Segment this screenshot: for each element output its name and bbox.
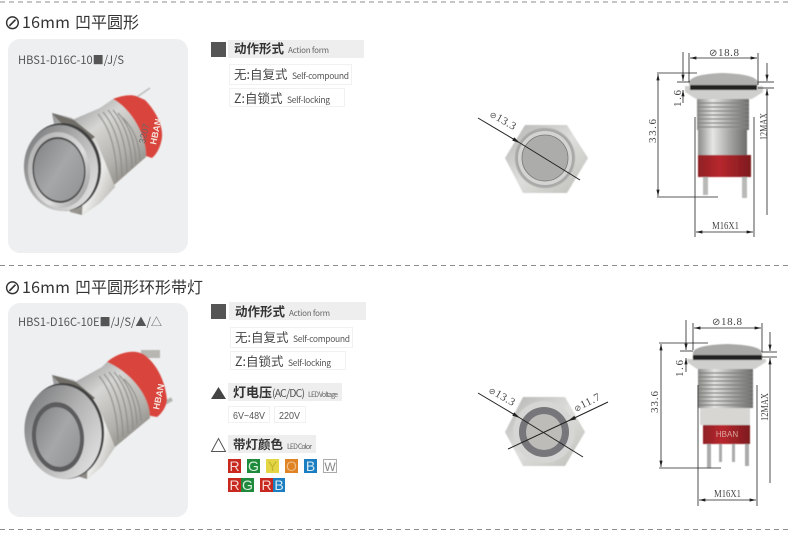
- dimension drawing 2: 12MAX: [759, 393, 771, 421]
- color swatches: R: [229, 458, 240, 474]
- front view 2: ⊘11.7: [572, 391, 603, 415]
- color swatches: G: [242, 477, 253, 493]
- spec: LED color: [212, 434, 336, 493]
- color swatches: Y: [268, 458, 278, 474]
- panel: product photo 2: [8, 303, 188, 517]
- dimension drawing 1: ⊘18.8: [709, 47, 740, 59]
- model number 1: HBS1-D16C-10■/J/S: [18, 52, 124, 68]
- heading: 16mm recessed flat round: ⊘: [4, 10, 21, 34]
- spec: action form 1: [211, 38, 364, 107]
- spec: action form 1: Self-locking: [287, 94, 330, 106]
- spec: action form 2: [211, 301, 366, 370]
- model number 2: HBS1-D16C-10E■/J/S/▲/△: [18, 314, 162, 330]
- color swatches: [228, 458, 336, 493]
- heading: 16mm recessed flat round: 凹平圆形: [75, 9, 139, 33]
- spec: action form 2: Action form: [289, 308, 330, 319]
- spec: LED voltage: LED Voltage: [308, 390, 338, 400]
- spec: action form 2: 动作形式: [235, 301, 286, 320]
- color swatches: O: [286, 458, 297, 474]
- color swatches: B: [274, 477, 284, 493]
- spec: action form 1: 动作形式: [234, 38, 285, 57]
- dimension drawing 2: 33.6: [649, 390, 661, 413]
- spec: action form 2: 无:自复式: [235, 327, 289, 346]
- dimension drawing 2: HBAN: [716, 430, 738, 439]
- spec: action form 1: 无:自复式: [234, 64, 288, 83]
- spec: LED color: 带灯颜色: [233, 434, 284, 453]
- panel: product photo 2: HBAN: [151, 383, 166, 410]
- photo: flat push button: [20, 88, 162, 215]
- front view 2: [478, 384, 608, 466]
- color swatches: R: [229, 477, 240, 493]
- photo: ring-lit push button: [20, 350, 172, 483]
- spec: action form 1: Self-compound: [292, 70, 349, 82]
- heading: 16mm recessed flat round with ring light: ⊘: [4, 275, 21, 299]
- dimension drawing 1: M16X1: [712, 220, 739, 232]
- color swatches: G: [248, 458, 259, 474]
- spec: LED voltage: 灯电压: [233, 382, 272, 401]
- dimension drawing 2: M16X1: [714, 488, 741, 500]
- front view 1: ⊘13.3: [488, 108, 519, 133]
- color swatches: W: [324, 460, 336, 474]
- panel: product photo 1: 3207: [137, 123, 151, 144]
- heading: 16mm recessed flat round with ring light: 凹平圆形环形带灯: [75, 274, 203, 298]
- dimension drawing 1: 12MAX: [758, 113, 770, 140]
- front view 2: ⊘13.3: [486, 384, 518, 409]
- color swatches: R: [261, 477, 272, 493]
- front view 1: [478, 108, 588, 193]
- spec: LED voltage: 6V~48V: [233, 411, 265, 422]
- color swatches: B: [306, 458, 315, 474]
- dimension drawing 1: 1.6: [672, 90, 684, 107]
- spec: LED voltage: 220V: [279, 411, 300, 422]
- heading: 16mm recessed flat round: 16mm: [22, 9, 70, 33]
- spec: action form 2: Self-locking: [288, 357, 331, 369]
- panel: product photo 1: HBAN: [148, 118, 163, 145]
- dimension drawing 2: 1.6: [674, 360, 686, 377]
- heading: 16mm recessed flat round with ring light: 16mm: [22, 274, 70, 298]
- spec: action form 2: Z:自锁式: [235, 351, 284, 370]
- spec: LED voltage: (AC/DC): [272, 386, 305, 401]
- spec: action form 1: Z:自锁式: [234, 88, 283, 107]
- dimension drawing 1: 33.6: [647, 118, 659, 143]
- dimension drawing 1: [647, 47, 774, 237]
- spec: LED voltage: [211, 382, 342, 422]
- spec: action form 2: Self-compound: [293, 333, 350, 345]
- dimension drawing 2: ⊘18.8: [712, 316, 742, 328]
- dimension drawing 2: [649, 316, 777, 506]
- spec: action form 1: Action form: [288, 45, 329, 56]
- panel: product photo 1: [8, 39, 188, 253]
- spec: LED color: LED Color: [287, 442, 312, 452]
